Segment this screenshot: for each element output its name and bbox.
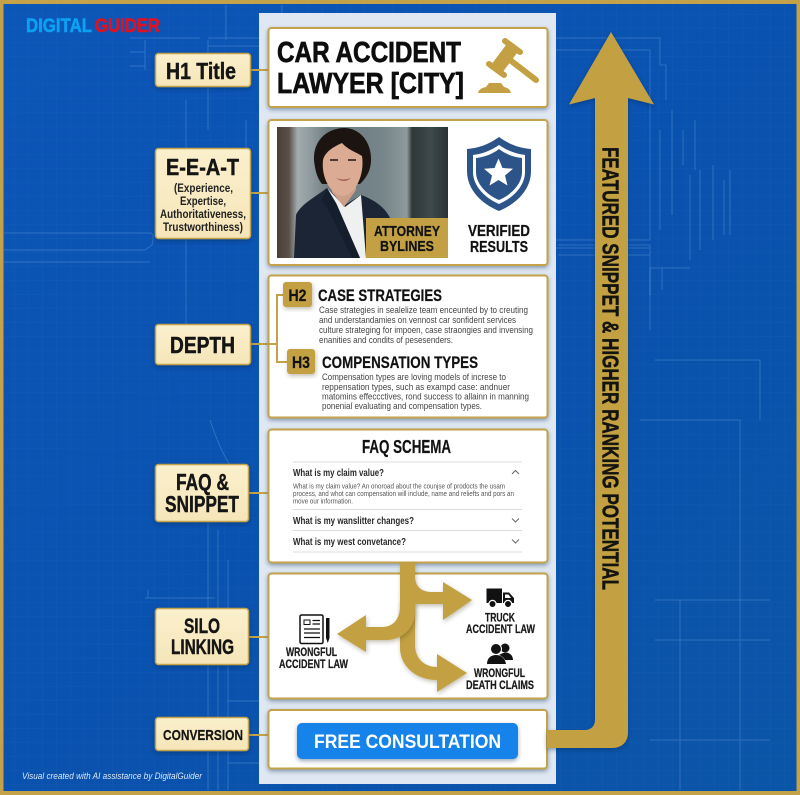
label: FAQ and Snippet: FAQ & [176, 469, 229, 495]
badge: attorney bylines [366, 218, 448, 258]
label: E-E-A-T: Authoritativeness, [160, 207, 246, 221]
heading connector [268, 295, 288, 362]
panel: E-E-A-T card [268, 120, 548, 265]
label: Depth: DEPTH [170, 332, 235, 358]
heading: compensation types: COMPENSATION TYPES [322, 353, 478, 372]
text: arrow caption: FEATURED SNIPPET & HIGHER RANKING POTENTIAL [598, 147, 624, 590]
title text [277, 37, 464, 100]
heading: case strategies: CASE STRATEGIES [318, 286, 442, 305]
logo: DigitalGuider: DIGITAL [26, 16, 92, 37]
badge: attorney bylines: ATTORNEY [374, 223, 440, 240]
title text: LAWYER [CITY] [277, 68, 464, 100]
badge: H3 [287, 349, 315, 374]
panel: silo linking card [268, 563, 548, 698]
button: free consultation: FREE CONSULTATION [314, 732, 501, 753]
FAQ item dividers [293, 462, 522, 552]
label: E-E-A-T [156, 148, 250, 238]
verified results text [468, 223, 530, 256]
text: case strategies body: enanities and condits of pesesenders. [319, 335, 453, 346]
label: FAQ and Snippet [156, 464, 248, 522]
title text: CAR ACCIDENT [277, 37, 461, 69]
logo: DigitalGuider: GUIDER [95, 16, 160, 37]
label: H1 Title [156, 54, 250, 86]
panel: depth card [268, 276, 548, 418]
FAQ item: claim value: move our information. [293, 498, 353, 506]
verified results text: VERIFIED [468, 223, 530, 240]
text: compensation types body: matomins effeccctives, rond success to allainn in manning [322, 392, 529, 402]
label: H1 Title: H1 Title [166, 58, 236, 84]
label: E-E-A-T: Trustworthiness) [163, 220, 243, 234]
text: wrongful death claims [466, 666, 534, 692]
heading: FAQ schema: FAQ SCHEMA [362, 437, 451, 457]
text: truck accident law: ACCIDENT LAW [466, 622, 535, 636]
label: E-E-A-T: Expertise, [180, 194, 226, 208]
text: compensation types body: reppensation types, such as exampd case: andnuer [322, 382, 510, 393]
text: truck accident law [466, 610, 535, 636]
text: wrongful accident law: WRONGFUL [286, 645, 337, 659]
label: FAQ and Snippet: SNIPPET [165, 491, 239, 517]
icon: document with pen [300, 615, 330, 644]
arrows: silo branches [337, 563, 472, 692]
text: compensation types body [322, 372, 529, 412]
text: case strategies body: culture strateging for impoen, case straongies and invensing [319, 325, 533, 336]
text: case strategies body: and understandamies on vennost car sonfident services [319, 315, 516, 326]
text: case strategies body: Case strategies in sealelize team enceunted by to creuting [319, 305, 528, 316]
label: Conversion: CONVERSION [163, 727, 243, 744]
FAQ item: west convetance [293, 537, 519, 548]
text: wrongful death claims: WRONGFUL [474, 666, 525, 680]
icon: gavel [478, 41, 536, 93]
badge: H2 [283, 282, 312, 307]
label: E-E-A-T: (Experience, [174, 181, 233, 195]
text: case strategies body [319, 305, 533, 346]
connector lines from labels to cards [248, 70, 268, 735]
icon: verified shield [467, 137, 531, 211]
badge: H3: H3 [292, 353, 310, 372]
label: Silo Linking: LINKING [171, 636, 234, 659]
text: truck accident law: TRUCK [485, 610, 515, 624]
FAQ item: claim value [293, 468, 519, 506]
FAQ item: claim value: process, and whot can compensation will include, name and reliefts and pors an [293, 491, 514, 498]
panel: conversion card [268, 710, 547, 768]
FAQ item: claim value: What is my claim value? [293, 468, 384, 479]
footer credit: Visual created with AI assistance by DigitalGuider [22, 771, 203, 782]
central page column [259, 13, 556, 784]
verified results text: RESULTS [470, 239, 528, 256]
label: Silo Linking: SILO [184, 615, 220, 638]
FAQ item: wanslitter changes [293, 516, 519, 527]
photo: attorney portrait [277, 127, 448, 258]
logo: DigitalGuider [26, 16, 160, 37]
FAQ item: wanslitter changes: What is my wanslitter changes? [293, 516, 414, 527]
FAQ item: west convetance: What is my west convetance? [293, 537, 406, 548]
arrow: ranking growth arrow [547, 32, 654, 748]
label: Silo Linking [156, 608, 248, 664]
text: compensation types body: Compensation types are loving models of increse to [322, 372, 506, 383]
badge: H2: H2 [288, 286, 306, 305]
icon: people [487, 644, 513, 664]
icon: truck [486, 588, 514, 608]
label: Depth [156, 324, 250, 364]
panel: H1 title card [268, 28, 548, 107]
badge: attorney bylines: BYLINES [380, 238, 434, 255]
panel: FAQ schema card [268, 430, 548, 562]
label: Conversion [156, 718, 248, 750]
text: wrongful death claims: DEATH CLAIMS [466, 678, 534, 692]
button: free consultation [297, 723, 518, 759]
text: compensation types body: ponenial evaluating and compensation types. [322, 401, 482, 412]
FAQ item: claim value: What is my claim value? An onoroad about the counjse of prodocts the usam [293, 484, 505, 490]
text: wrongful accident law [279, 645, 348, 671]
text: wrongful accident law: ACCIDENT LAW [279, 657, 348, 671]
label: E-E-A-T: E-E-A-T [166, 154, 239, 180]
